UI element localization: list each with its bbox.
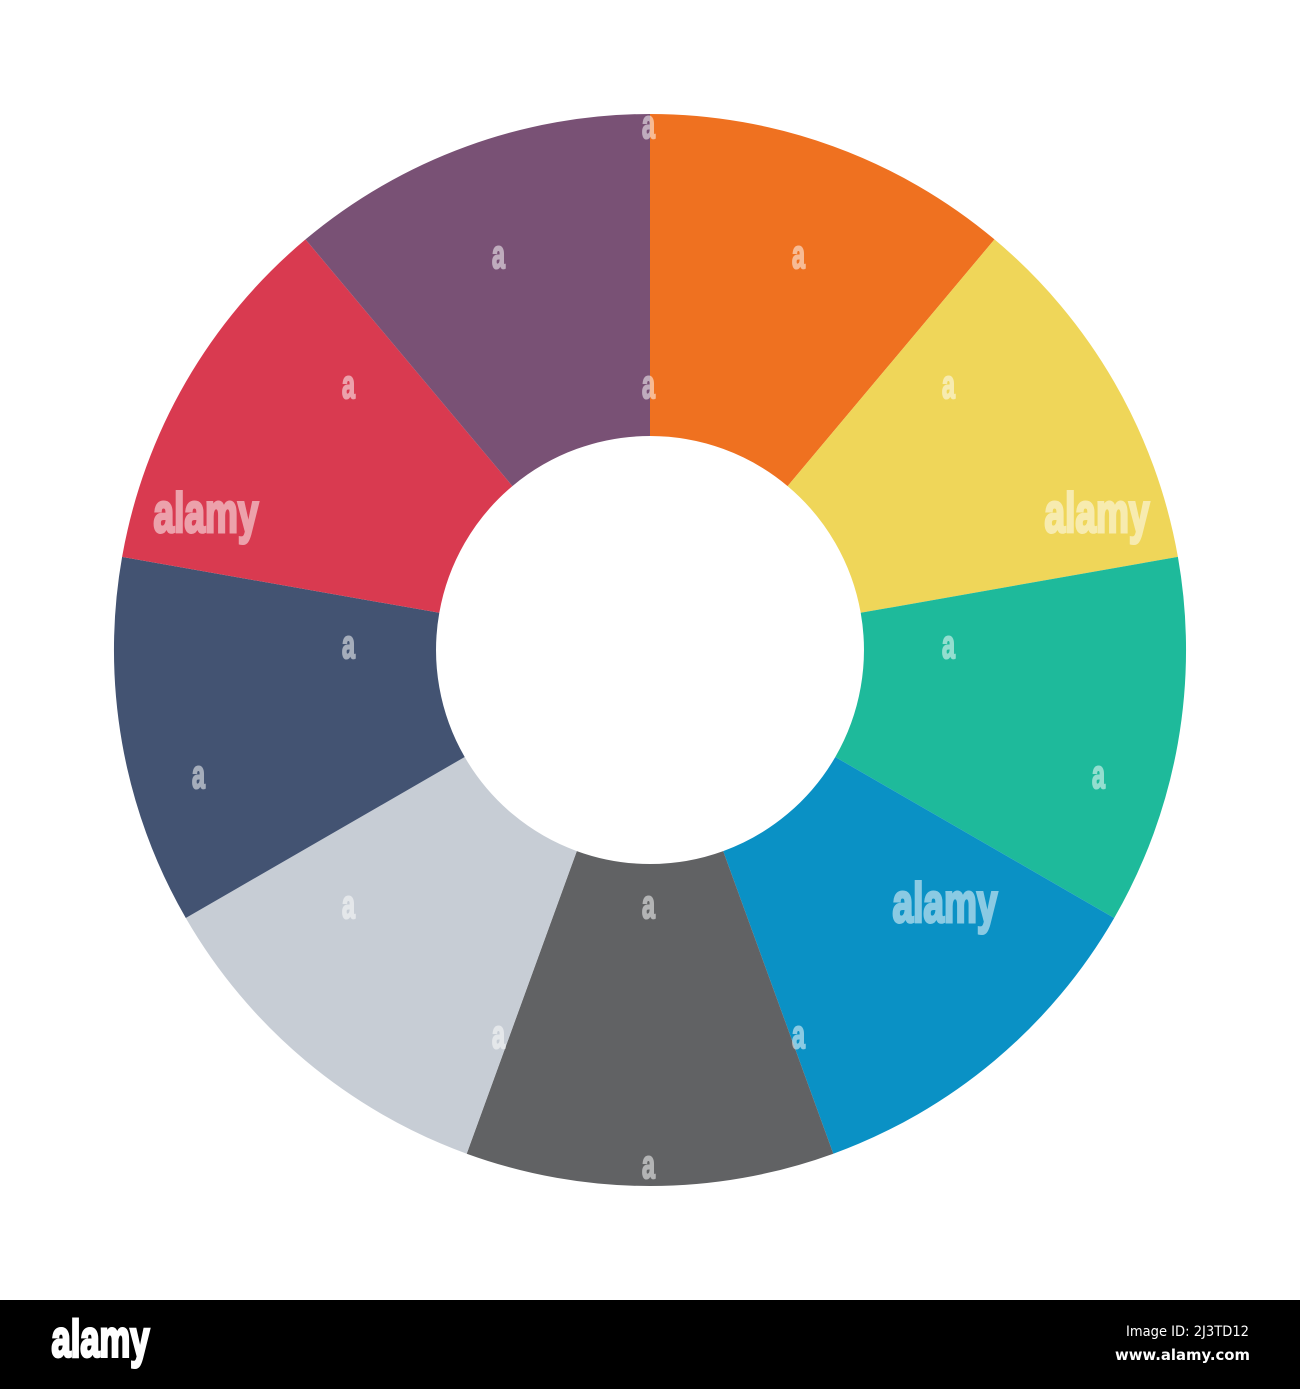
watermark: red segment: alamy <box>154 481 258 544</box>
watermarks: a <box>942 623 955 667</box>
watermarks: a <box>642 103 655 147</box>
footer bar <box>0 1300 1300 1389</box>
segment: orange <box>650 114 994 486</box>
watermarks: a <box>642 1143 655 1187</box>
watermarks: a <box>792 233 805 277</box>
watermarks: a <box>342 623 355 667</box>
watermark: blue segment: alamy <box>892 871 998 934</box>
segment: navy <box>114 557 465 918</box>
watermark: yellow segment: alamy <box>1044 481 1150 544</box>
watermarks: a <box>492 233 505 277</box>
footer logo: alamy <box>52 1310 150 1368</box>
watermarks: a <box>492 1013 505 1057</box>
watermarks: a <box>642 883 655 927</box>
watermarks: a <box>342 363 355 407</box>
segment: light gray <box>186 757 577 1154</box>
donut chart <box>114 114 1186 1186</box>
segment: teal <box>835 557 1186 918</box>
image id: Image ID: 2J3TD12 <box>1126 1324 1249 1340</box>
watermarks: a <box>792 1013 805 1057</box>
segment: purple <box>306 114 650 486</box>
website: www.alamy.com <box>1115 1346 1250 1364</box>
watermarks: a <box>342 883 355 927</box>
watermarks: a <box>942 363 955 407</box>
segment: dark gray <box>467 851 833 1186</box>
segment: red <box>122 239 512 613</box>
watermarks <box>154 103 1150 1187</box>
watermarks: a <box>642 363 655 407</box>
watermarks: a <box>1092 753 1105 797</box>
segment: yellow <box>788 239 1178 613</box>
segment: blue <box>723 757 1114 1154</box>
watermarks: a <box>192 753 205 797</box>
